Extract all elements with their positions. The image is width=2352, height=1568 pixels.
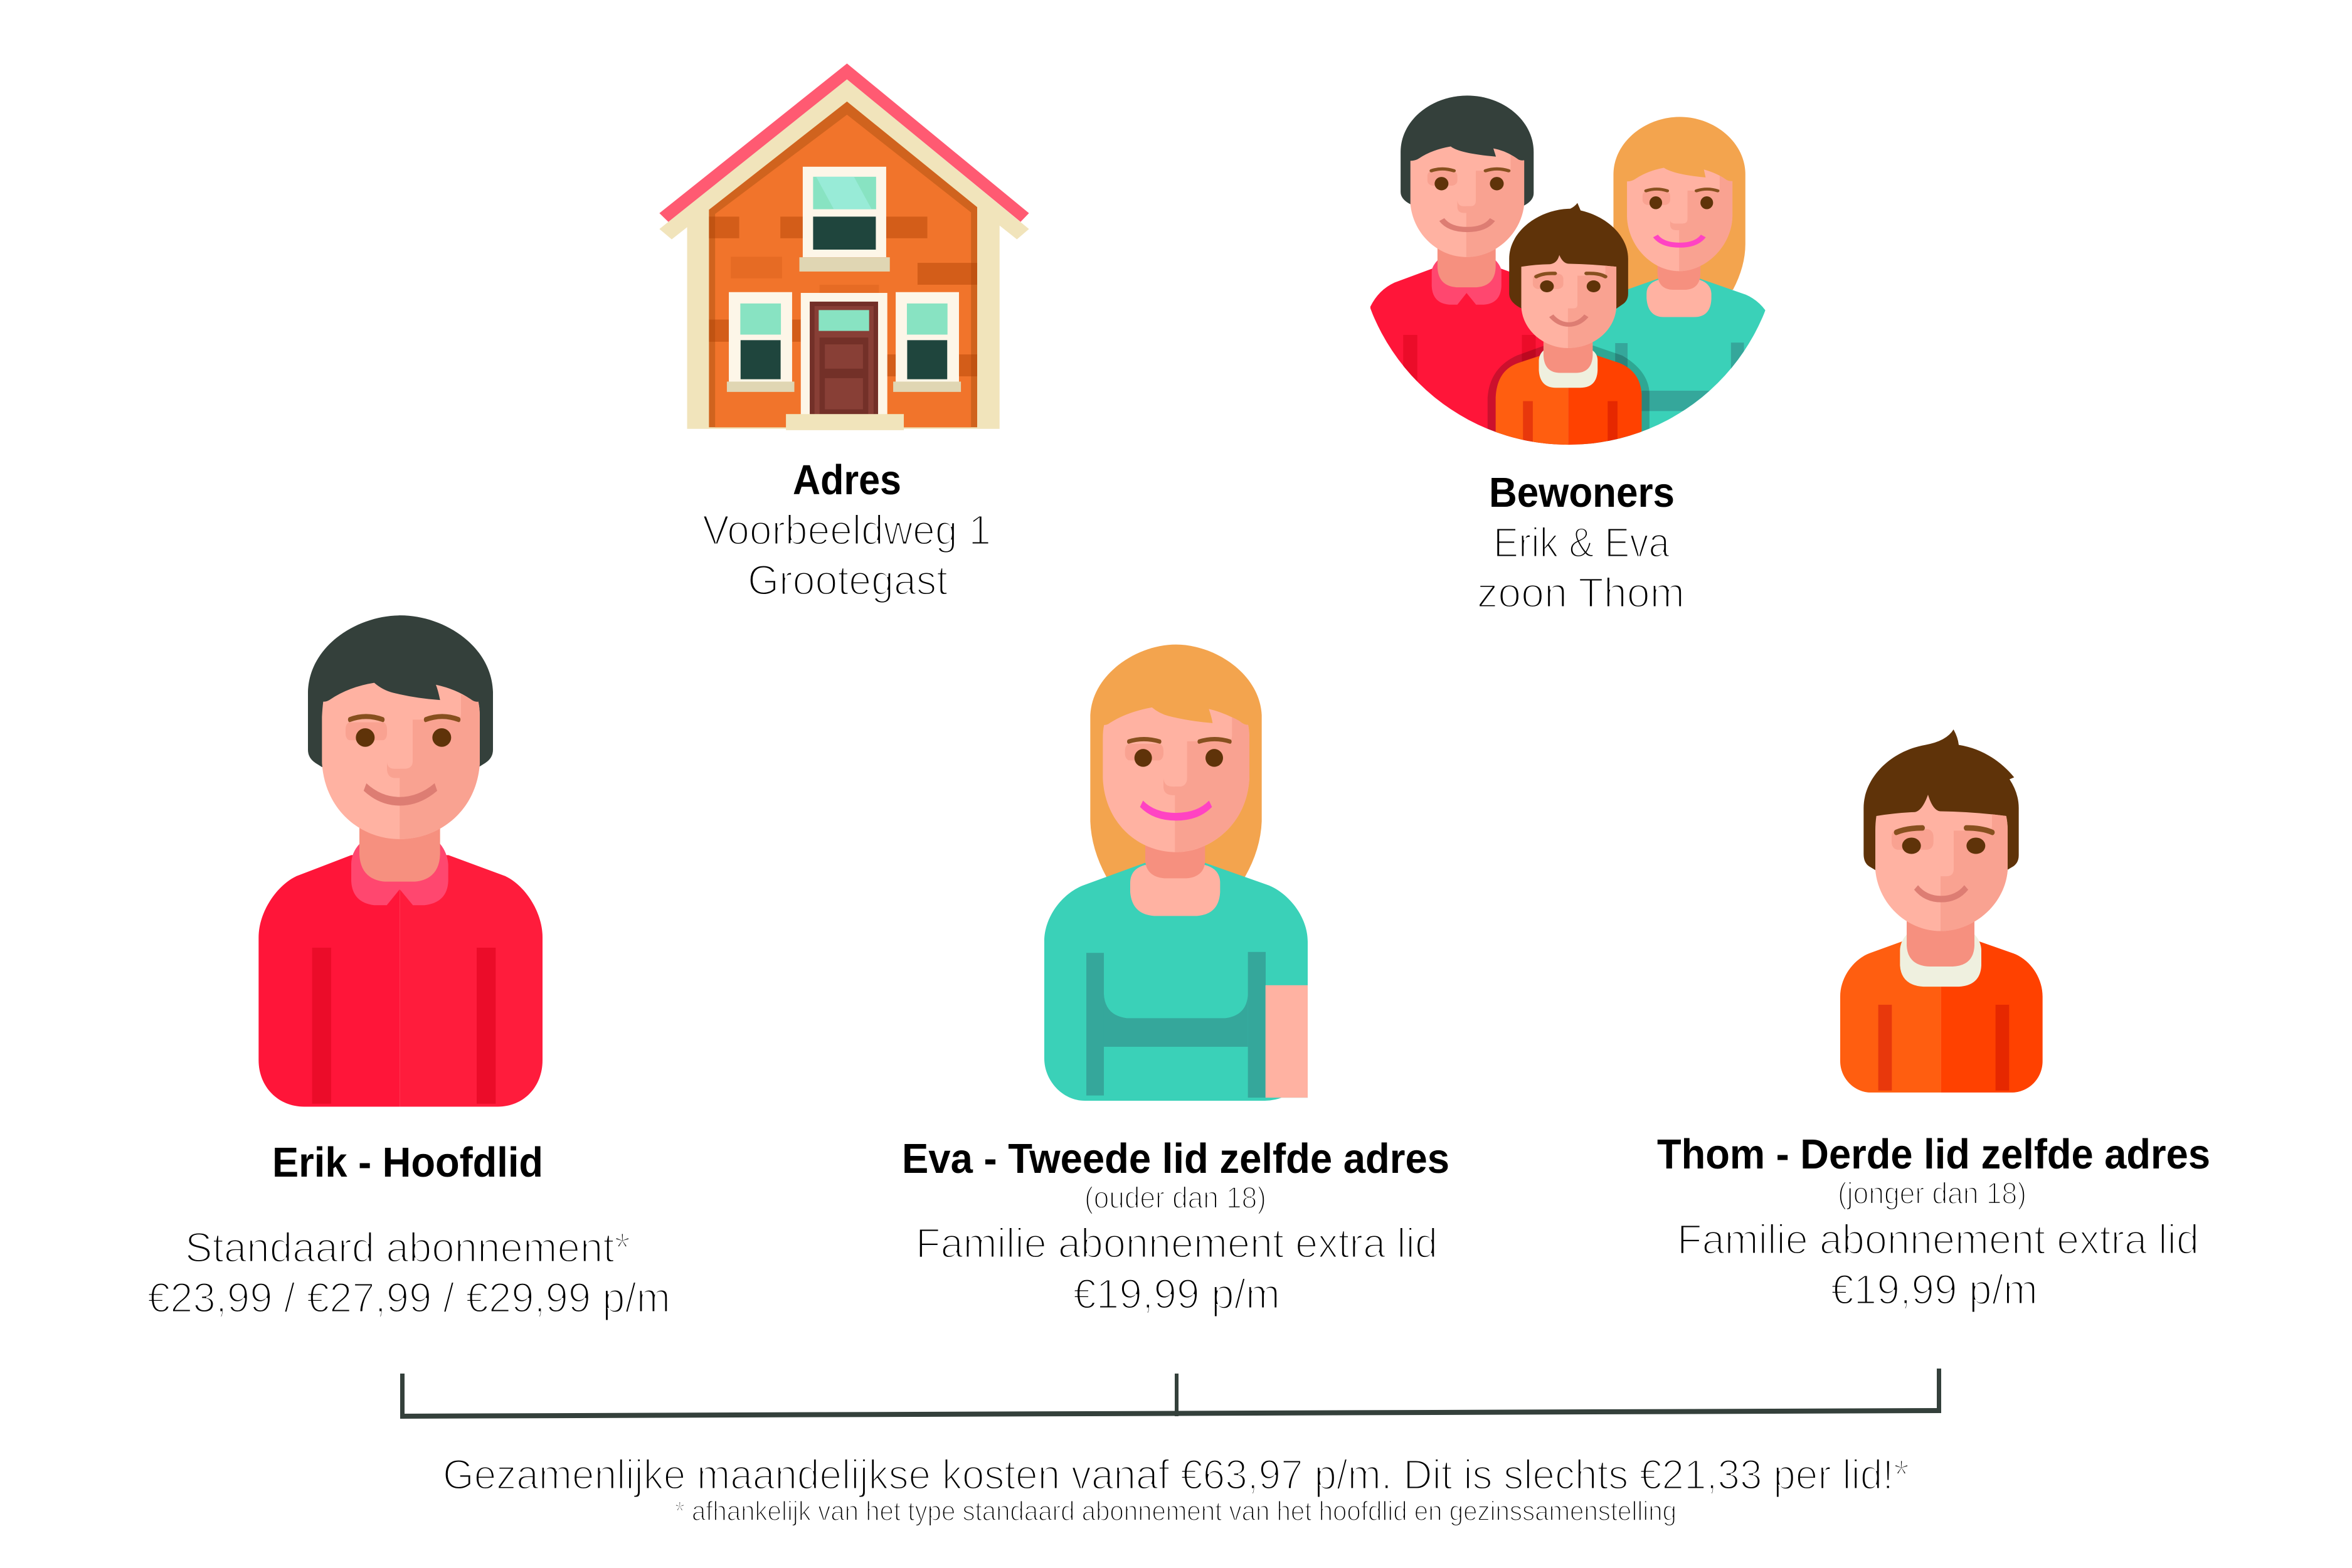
face	[322, 683, 480, 839]
neck	[1145, 843, 1205, 878]
left window	[727, 292, 795, 392]
icon: Erik	[258, 615, 543, 1107]
right window	[893, 292, 961, 392]
shirt	[1044, 863, 1308, 1101]
icon: house	[659, 63, 1029, 430]
text: Thom price: €19,99 p/m	[1831, 1266, 2038, 1313]
neck	[359, 821, 440, 882]
text: town: Grootegast	[748, 557, 948, 604]
brick wall	[715, 115, 971, 427]
text: Eva price: €19,99 p/m	[1073, 1271, 1280, 1318]
text: total monthly cost: Gezamenlijke maandelijkse kosten vanaf €63,97 p/m. Dit is slechts €21,33 per lid!*	[443, 1451, 1909, 1498]
father	[1370, 95, 1564, 447]
text: Thom age note: (jonger dan 18)	[1838, 1177, 2026, 1210]
icon: family portrait	[1370, 95, 1765, 451]
text: Eva subscription: Familie abonnement extra lid	[916, 1220, 1438, 1267]
collar	[351, 844, 448, 905]
front door	[786, 293, 904, 430]
text: Erik subscription: Standaard abonnement*	[185, 1224, 630, 1271]
collar	[1900, 935, 1981, 987]
sweater	[1840, 941, 2043, 1093]
text: parents: Erik & Eva	[1493, 519, 1670, 566]
heading: Eva: Eva - Tweede lid zelfde adres	[902, 1135, 1449, 1182]
face	[1103, 707, 1249, 852]
bracket connecting the three members	[400, 1369, 1941, 1419]
text: son: zoon Thom	[1477, 569, 1685, 617]
text: Eva age note: (ouder dan 18)	[1084, 1182, 1266, 1215]
house walls and roof trim	[659, 80, 1029, 429]
shirt	[258, 855, 543, 1107]
face	[1875, 795, 2008, 931]
icon: Eva	[1044, 645, 1308, 1101]
hair	[1863, 729, 2019, 870]
wall shadow band	[709, 102, 977, 427]
mother	[1579, 117, 1765, 447]
heading: Thom: Thom - Derde lid zelfde adres	[1657, 1131, 2210, 1178]
neck	[1907, 919, 1974, 967]
hair	[1090, 645, 1262, 877]
text: footnote: * afhankelijk van het type standaard abonnement van het hoofdlid en gezinssamenstelling	[675, 1496, 1677, 1527]
red roof	[659, 63, 1029, 222]
text: street address: Voorbeeldweg 1	[702, 507, 991, 554]
son	[1488, 203, 1650, 451]
heading: Adres: Adres	[793, 457, 901, 504]
text: Erik prices: €23,99 / €27,99 / €29,99 p/m	[147, 1274, 670, 1322]
arm	[1266, 985, 1308, 1098]
icon: Thom	[1840, 729, 2043, 1093]
text: Thom subscription: Familie abonnement extra lid	[1677, 1216, 2199, 1263]
heading: Bewoners: Bewoners	[1489, 469, 1675, 516]
top window	[800, 167, 890, 272]
bricks	[709, 216, 977, 376]
hair back	[308, 615, 493, 767]
heading: Erik: Erik - Hoofdlid	[272, 1139, 543, 1186]
family clipped to circle	[1370, 95, 1765, 451]
chest	[1130, 865, 1220, 916]
